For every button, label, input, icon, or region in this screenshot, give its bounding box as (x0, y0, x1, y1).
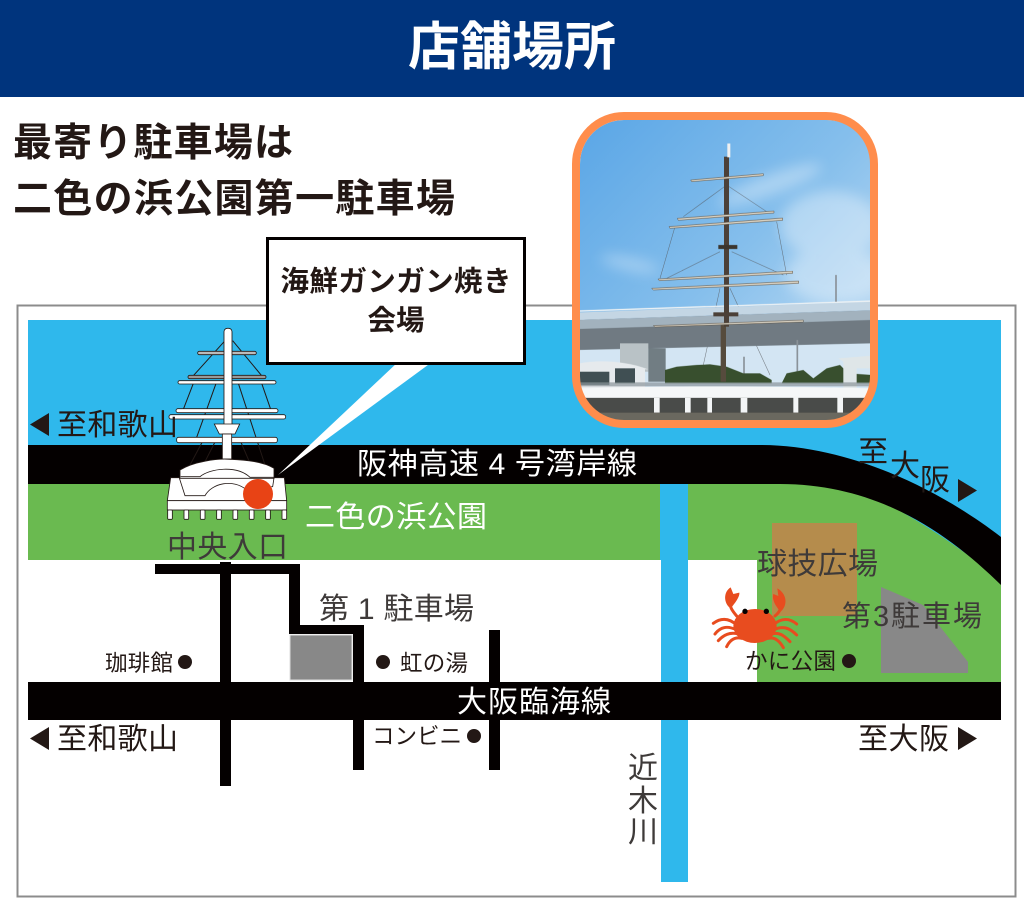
right park green (688, 470, 1001, 682)
poles (744, 275, 836, 375)
direction: to Wakayama upper: 至和歌山 (57, 409, 178, 442)
park green (28, 484, 660, 560)
label: Kogi river: 川 (628, 816, 658, 849)
label: central entrance: 中央入口 (167, 531, 288, 564)
road label: Osaka coastal line: 大阪臨海線 (457, 686, 611, 719)
rigging (660, 185, 787, 375)
expressway (28, 445, 1001, 585)
side streets (155, 562, 500, 786)
label: Kogi river: 近 (628, 752, 658, 785)
label: parking 3: 第3駐車場 (842, 600, 982, 633)
label: Nishikinohama park: 二色の浜公園 (305, 501, 487, 534)
direction: to Osaka lower: 至大阪 (858, 723, 949, 756)
direction: to Osaka upper (858, 436, 977, 502)
ship illustration (167, 328, 287, 519)
title: 店舗場所 (408, 19, 616, 77)
river (661, 484, 688, 882)
sky under bridge (580, 344, 870, 388)
Osaka coastal road (28, 682, 1001, 720)
water (28, 320, 1001, 560)
ball field (772, 523, 857, 616)
venue marker (243, 479, 273, 509)
direction: to Wakayama lower: 至和歌山 (57, 723, 178, 756)
map frame (18, 306, 1016, 896)
callout: venue (268, 238, 524, 475)
label: Kogi river (628, 752, 658, 849)
parking 1 (290, 635, 352, 680)
parking note text (13, 122, 455, 221)
road label: expressway: 阪神高速 4 号湾岸線 (357, 448, 637, 481)
label: ball field: 球技広場 (757, 548, 878, 581)
header band (0, 0, 1024, 97)
map (28, 320, 1001, 882)
direction: to Osaka upper: 阪 (920, 464, 950, 497)
photo of ship mast (576, 116, 885, 424)
mast (721, 325, 726, 382)
label: cafe: 珈琲館 (105, 651, 173, 676)
direction: to Osaka upper: 至 (858, 436, 888, 469)
trees (665, 364, 872, 383)
bridge (579, 302, 872, 320)
label: parking 1: 第 1 駐車場 (319, 593, 474, 626)
callout: venue: 会場 (367, 305, 425, 337)
parking 3 (881, 587, 968, 673)
label: crab park: かに公園 (745, 649, 836, 674)
callout: venue: 海鮮ガンガン焼き (280, 266, 512, 298)
crab icon (713, 587, 797, 648)
label: Kogi river: 木 (628, 785, 658, 818)
direction: to Osaka upper: 大 (890, 450, 920, 483)
label: convenience store: コンビニ (372, 724, 462, 749)
parking note text: 二色の浜公園第一駐車場 (13, 178, 455, 221)
building (579, 361, 648, 388)
label: Niji no Yu: 虹の湯 (400, 651, 468, 676)
parking note text: 最寄り駐車場は (13, 122, 293, 165)
